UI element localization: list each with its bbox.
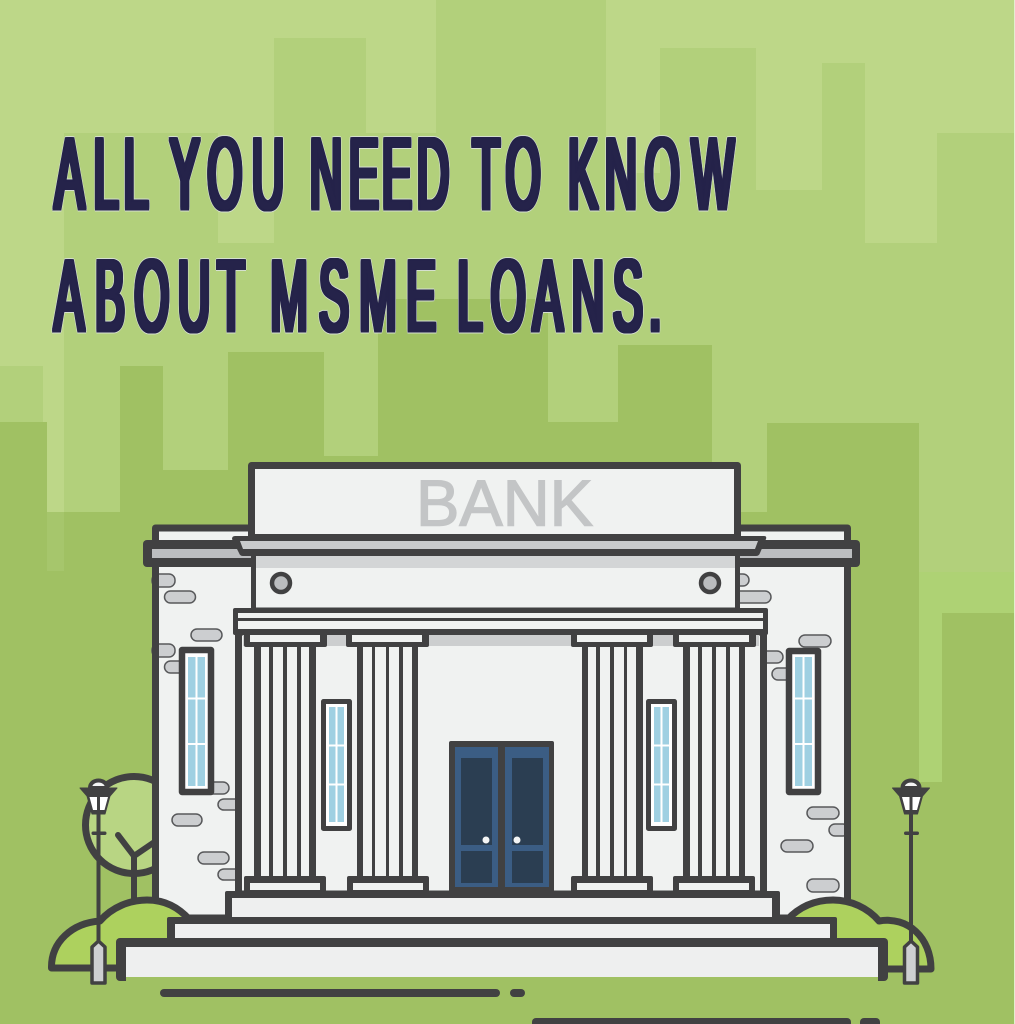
column 4 bbox=[673, 632, 756, 893]
lamp post: left bbox=[80, 780, 117, 983]
window: large right bbox=[789, 651, 818, 792]
double door bbox=[449, 741, 554, 893]
icon: tree bbox=[86, 776, 182, 905]
upper frieze bbox=[254, 552, 738, 610]
column 3 bbox=[571, 632, 653, 893]
front steps bbox=[116, 891, 888, 981]
bush: right bbox=[787, 900, 931, 969]
window: small right bbox=[648, 702, 674, 828]
window: small left bbox=[324, 702, 350, 828]
left and right wings bbox=[143, 528, 860, 918]
sign panel bbox=[252, 466, 738, 540]
sign cornice bbox=[232, 536, 766, 556]
title: ALL YOU NEED TO KNOW bbox=[55, 117, 734, 231]
bottom step bbox=[116, 938, 888, 981]
wall bricks bbox=[152, 574, 849, 892]
sign text: BANK bbox=[416, 466, 593, 540]
top step bbox=[225, 891, 780, 924]
entablature bbox=[233, 608, 768, 646]
ground lines bbox=[160, 989, 880, 1024]
central portico wall bbox=[238, 632, 764, 894]
title bbox=[54, 117, 734, 353]
lamp post: right bbox=[892, 780, 930, 983]
column 2 bbox=[346, 632, 429, 893]
title: ABOUT MSME LOANS. bbox=[54, 239, 661, 353]
middle step bbox=[167, 917, 837, 947]
column 1 bbox=[244, 632, 327, 893]
bank building bbox=[143, 466, 860, 918]
bush: left bbox=[51, 900, 200, 968]
window: large left bbox=[182, 650, 211, 792]
